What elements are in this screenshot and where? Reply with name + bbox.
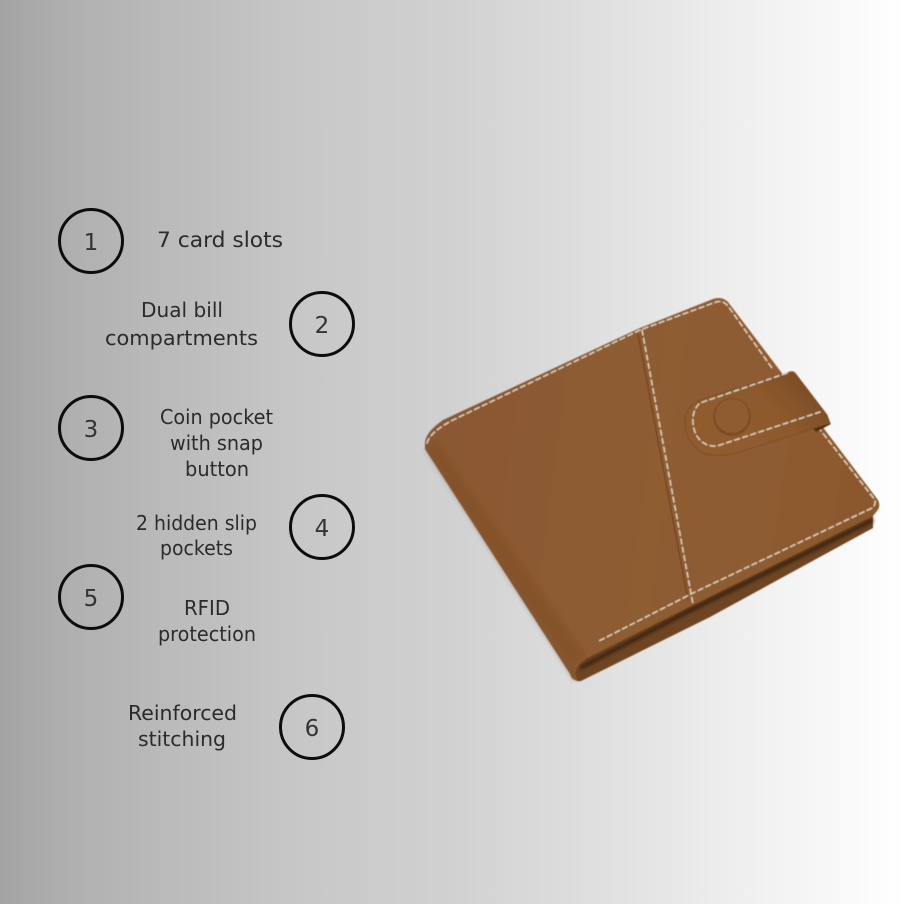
seam stitching bbox=[642, 330, 693, 604]
right and lower edge stitching bbox=[597, 427, 875, 642]
label 5: protection bbox=[158, 622, 256, 646]
label 4 bbox=[136, 511, 257, 560]
left fold shading bbox=[425, 442, 586, 680]
label 6: stitching bbox=[138, 727, 226, 751]
label 3: Coin pocket bbox=[160, 405, 273, 429]
dark seam crease bbox=[638, 334, 688, 600]
label 2 bbox=[105, 298, 258, 350]
wallet photo bbox=[425, 298, 879, 681]
label 6 bbox=[128, 701, 237, 751]
number circle 3: 3 bbox=[84, 417, 98, 443]
label 3: with snap bbox=[170, 431, 263, 455]
strap stitching bbox=[693, 373, 820, 446]
feature 5: RFID protection bbox=[60, 566, 256, 646]
label 4: pockets bbox=[160, 536, 233, 560]
feature 3: coin pocket bbox=[60, 396, 273, 481]
label 1: 7 card slots bbox=[157, 228, 283, 252]
feature 2: dual bill compartments bbox=[105, 292, 354, 356]
number circle 4 bbox=[290, 496, 354, 558]
snap button bbox=[713, 398, 751, 436]
number circle 6 bbox=[280, 696, 344, 758]
number circle 3 bbox=[60, 396, 122, 460]
label 3: button bbox=[185, 457, 249, 481]
strap shadow bbox=[812, 420, 831, 432]
wallet back layer and pages bbox=[570, 505, 873, 681]
number circle 2 bbox=[290, 292, 354, 356]
label 4: 2 hidden slip bbox=[136, 511, 257, 535]
number circle 4: 4 bbox=[315, 516, 329, 542]
feature 1: 7 card slots bbox=[60, 210, 283, 272]
label 2: compartments bbox=[105, 326, 258, 350]
feature 6: reinforced stitching bbox=[128, 696, 344, 758]
wallet front panel bbox=[425, 298, 879, 680]
snap strap bbox=[685, 372, 830, 455]
number circle 5: 5 bbox=[84, 586, 98, 612]
number circle 2: 2 bbox=[315, 313, 329, 339]
number circle 1: 1 bbox=[84, 230, 98, 256]
number circle 5 bbox=[60, 566, 122, 628]
label 3 bbox=[160, 405, 273, 481]
label 2: Dual bill bbox=[141, 298, 223, 322]
band shadow under front panel bbox=[580, 520, 873, 668]
feature 4: hidden slip pockets bbox=[136, 496, 354, 560]
top edge stitching bbox=[427, 302, 772, 443]
number circle 1 bbox=[60, 210, 122, 272]
label 6: Reinforced bbox=[128, 701, 237, 725]
number circle 6: 6 bbox=[305, 716, 319, 742]
label 5 bbox=[158, 596, 256, 646]
label 5: RFID bbox=[184, 596, 230, 620]
